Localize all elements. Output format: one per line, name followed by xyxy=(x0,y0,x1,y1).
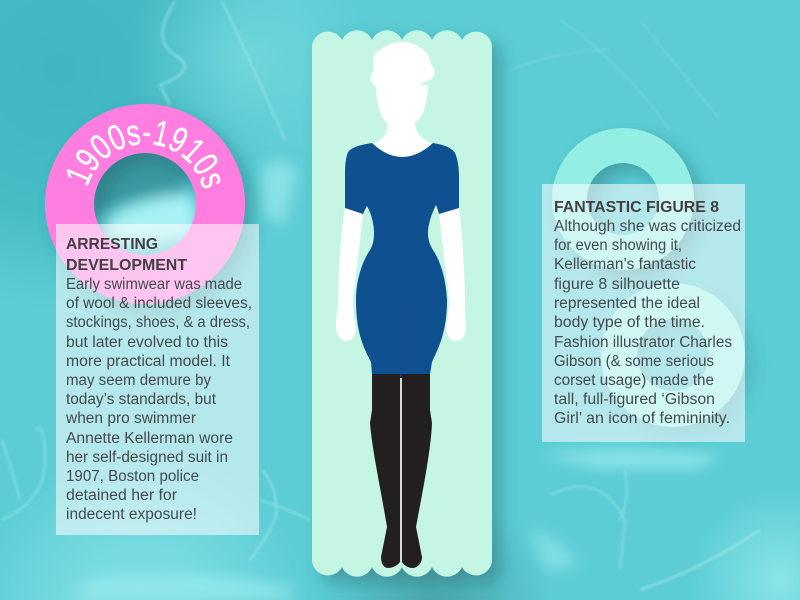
body text: stockings, shoes, & a dress, xyxy=(66,314,250,331)
body text: her self-designed suit in xyxy=(66,449,228,466)
body text: for even showing it, xyxy=(554,237,682,254)
body text: Kellerman’s fantastic xyxy=(554,256,696,273)
figure 8 rings xyxy=(552,128,745,427)
pool float with swimmer xyxy=(312,30,492,577)
heading: DEVELOPMENT xyxy=(66,257,187,274)
body text: Although she was criticized xyxy=(554,218,741,235)
body text: corset usage) made the xyxy=(554,372,714,389)
blue dress xyxy=(345,143,459,374)
body text: Gibson (& some serious xyxy=(554,353,714,370)
body text xyxy=(65,276,252,523)
body text: of wool & included sleeves, xyxy=(66,295,252,312)
heading: ARRESTING xyxy=(66,236,158,253)
body text: Annette Kellerman wore xyxy=(66,430,233,447)
stockings xyxy=(370,374,432,568)
hair xyxy=(370,42,434,90)
heading xyxy=(66,236,187,274)
body text: today’s standards, but xyxy=(66,391,217,408)
panel: arresting development xyxy=(56,224,259,535)
body text: tall, full-figured ‘Gibson xyxy=(554,391,715,408)
body text: 1907, Boston police xyxy=(66,468,199,485)
body text: body type of the time. xyxy=(554,314,705,331)
body text: but later evolved to this xyxy=(66,334,228,351)
body text: detained her for xyxy=(66,487,177,504)
body text xyxy=(554,218,741,427)
body text: Girl’ an icon of femininity. xyxy=(554,410,730,427)
body text: represented the ideal xyxy=(554,295,700,312)
body text: when pro swimmer xyxy=(65,410,196,427)
panel: fantastic figure 8 xyxy=(542,184,745,442)
head, neck and arms xyxy=(336,85,466,341)
body text: figure 8 silhouette xyxy=(554,276,680,293)
pink ring xyxy=(45,104,262,314)
heading: FANTASTIC FIGURE 8 xyxy=(554,199,719,216)
body text: indecent exposure! xyxy=(66,506,197,523)
woman silhouette xyxy=(336,42,466,568)
body text: Early swimwear was made xyxy=(66,276,242,293)
ring label: 1900s-1910s: 1900s-1910s xyxy=(66,121,220,188)
body text: may seem demure by xyxy=(66,372,211,389)
body text: more practical model. It xyxy=(66,353,231,370)
scalloped float mat xyxy=(312,30,492,577)
body text: Fashion illustrator Charles xyxy=(554,334,732,351)
